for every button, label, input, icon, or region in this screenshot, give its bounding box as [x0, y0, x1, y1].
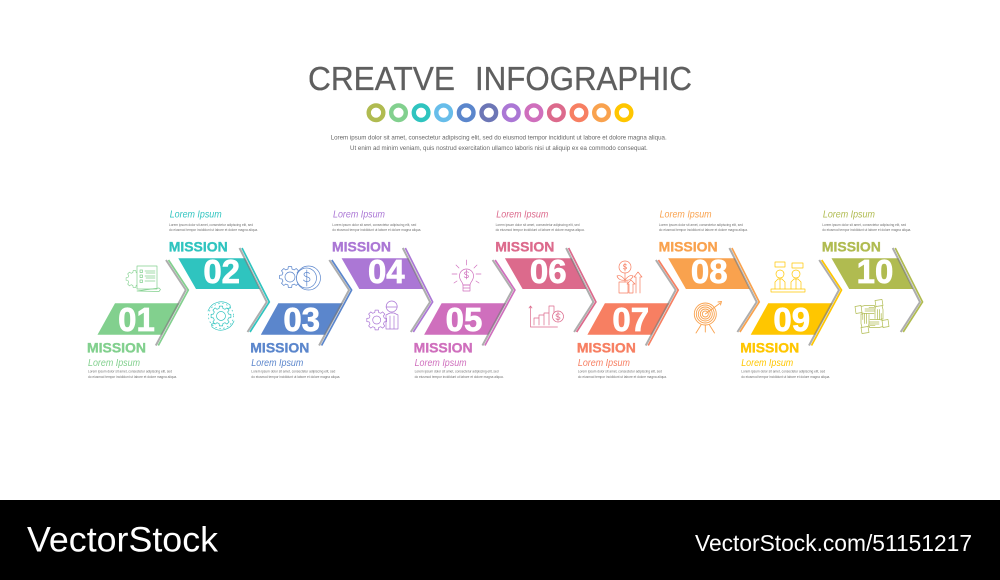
colour ring row: [369, 105, 631, 120]
step 02: Lorem Ipsum: [170, 210, 222, 221]
icon: gear and worker: [367, 301, 398, 330]
step 03: Lorem ipsum dolor sit amet, consectetur adipiscing elit, sed: [251, 370, 335, 374]
step 09: MISSION: [740, 340, 799, 356]
step 03: do eiusmod tempor incididunt ut labore et dolore magna aliqua.: [251, 375, 340, 379]
step 07: Lorem ipsum dolor sit amet, consectetur adipiscing elit, sed: [578, 370, 662, 374]
step 06: Lorem ipsum dolor sit amet, consectetur adipiscing elit, sed: [496, 223, 580, 227]
step 06: MISSION: [495, 239, 554, 255]
step 02: MISSION: [169, 239, 228, 255]
step 01: Lorem Ipsum: [88, 358, 140, 369]
step 05: [414, 260, 515, 379]
step 05: 05: [446, 301, 482, 338]
step 10: MISSION: [822, 239, 881, 255]
step 04: 04: [368, 253, 405, 290]
icon: money plant and arrows: [617, 261, 642, 293]
step 08: 08: [691, 253, 728, 290]
step 04: do eiusmod tempor incididunt ut labore et dolore magna aliqua.: [332, 228, 421, 232]
step 05: Lorem ipsum dolor sit amet, consectetur adipiscing elit, sed: [415, 370, 499, 374]
step 09: [740, 260, 842, 379]
title: INFOGRAPHIC: [475, 61, 692, 98]
step 09: do eiusmod tempor incididunt ut labore et dolore magna aliqua.: [741, 375, 830, 379]
icon: gear and coin: [280, 266, 320, 290]
step 01: MISSION: [87, 340, 146, 356]
intro paragraph: Ut enim ad minim veniam, quis nostrud exercitation ullamco laboris nisi ut aliquip ex ea commodo consequat.: [350, 145, 648, 152]
step 08: Lorem ipsum dolor sit amet, consectetur adipiscing elit, sed: [659, 223, 743, 227]
step 01: do eiusmod tempor incididunt ut labore et dolore magna aliqua.: [88, 375, 177, 379]
step 05: MISSION: [414, 340, 473, 356]
step 02: [169, 210, 269, 332]
step 04: MISSION: [332, 239, 391, 255]
step 03: MISSION: [250, 340, 309, 356]
icon: checklist and gear: [126, 266, 160, 292]
step 07: MISSION: [577, 340, 636, 356]
step 03: [250, 260, 352, 379]
step 08: do eiusmod tempor incididunt ut labore et dolore magna aliqua.: [659, 228, 748, 232]
step 01: 01: [118, 301, 155, 338]
step 02: do eiusmod tempor incididunt ut labore et dolore magna aliqua.: [169, 228, 258, 232]
step 10: do eiusmod tempor incididunt ut labore et dolore magna aliqua.: [822, 228, 911, 232]
step 09: Lorem ipsum dolor sit amet, consectetur adipiscing elit, sed: [741, 370, 825, 374]
step 07: Lorem Ipsum: [578, 358, 630, 369]
step 10: Lorem Ipsum: [823, 210, 875, 221]
step 01: [87, 260, 188, 379]
watermark bar: VectorStock: [27, 520, 218, 560]
step 10: 10: [857, 253, 893, 290]
step 08: [659, 210, 759, 332]
title: [308, 61, 692, 98]
step 09: Lorem Ipsum: [741, 358, 793, 369]
step 07: [577, 260, 678, 379]
step 06: do eiusmod tempor incididunt ut labore et dolore magna aliqua.: [496, 228, 585, 232]
step 02: 02: [203, 253, 240, 290]
step 04: Lorem Ipsum: [333, 210, 385, 221]
intro paragraph: Lorem ipsum dolor sit amet, consectetur adipiscing elit, sed do eiusmod tempor incididunt ut labore et dolore magna aliqua.: [331, 135, 667, 142]
step 06: Lorem Ipsum: [496, 210, 548, 221]
step 06: 06: [530, 253, 567, 290]
watermark bar: [0, 500, 1000, 580]
step 02: Lorem ipsum dolor sit amet, consectetur adipiscing elit, sed: [169, 223, 253, 227]
icon: four joined hands: [855, 300, 889, 334]
step 05: Lorem Ipsum: [415, 358, 467, 369]
step 10: Lorem ipsum dolor sit amet, consectetur adipiscing elit, sed: [822, 223, 906, 227]
step 07: do eiusmod tempor incididunt ut labore et dolore magna aliqua.: [578, 375, 667, 379]
step 07: 07: [612, 301, 649, 338]
step 03: Lorem Ipsum: [251, 358, 303, 369]
step 03: 03: [283, 301, 320, 338]
icon: bar chart with coin: [529, 306, 564, 327]
icon: target with arrow: [694, 302, 722, 333]
step 04: Lorem ipsum dolor sit amet, consectetur adipiscing elit, sed: [332, 223, 416, 227]
watermark bar: VectorStock.com/51151217: [695, 530, 972, 556]
icon: two people at a desk: [771, 262, 805, 292]
step 06: [495, 210, 596, 332]
step 01: Lorem ipsum dolor sit amet, consectetur adipiscing elit, sed: [88, 370, 172, 374]
step 08: MISSION: [659, 239, 718, 255]
title: CREATVE: [308, 61, 455, 98]
icon: light bulb: [452, 260, 481, 291]
step 08: Lorem Ipsum: [660, 210, 712, 221]
step 09: 09: [773, 301, 810, 338]
step 05: do eiusmod tempor incididunt ut labore et dolore magna aliqua.: [415, 375, 504, 379]
step 04: [332, 210, 433, 332]
intro paragraph: [331, 135, 667, 152]
icon: gear in circular arrows: [208, 302, 234, 330]
step 10: [822, 210, 922, 332]
